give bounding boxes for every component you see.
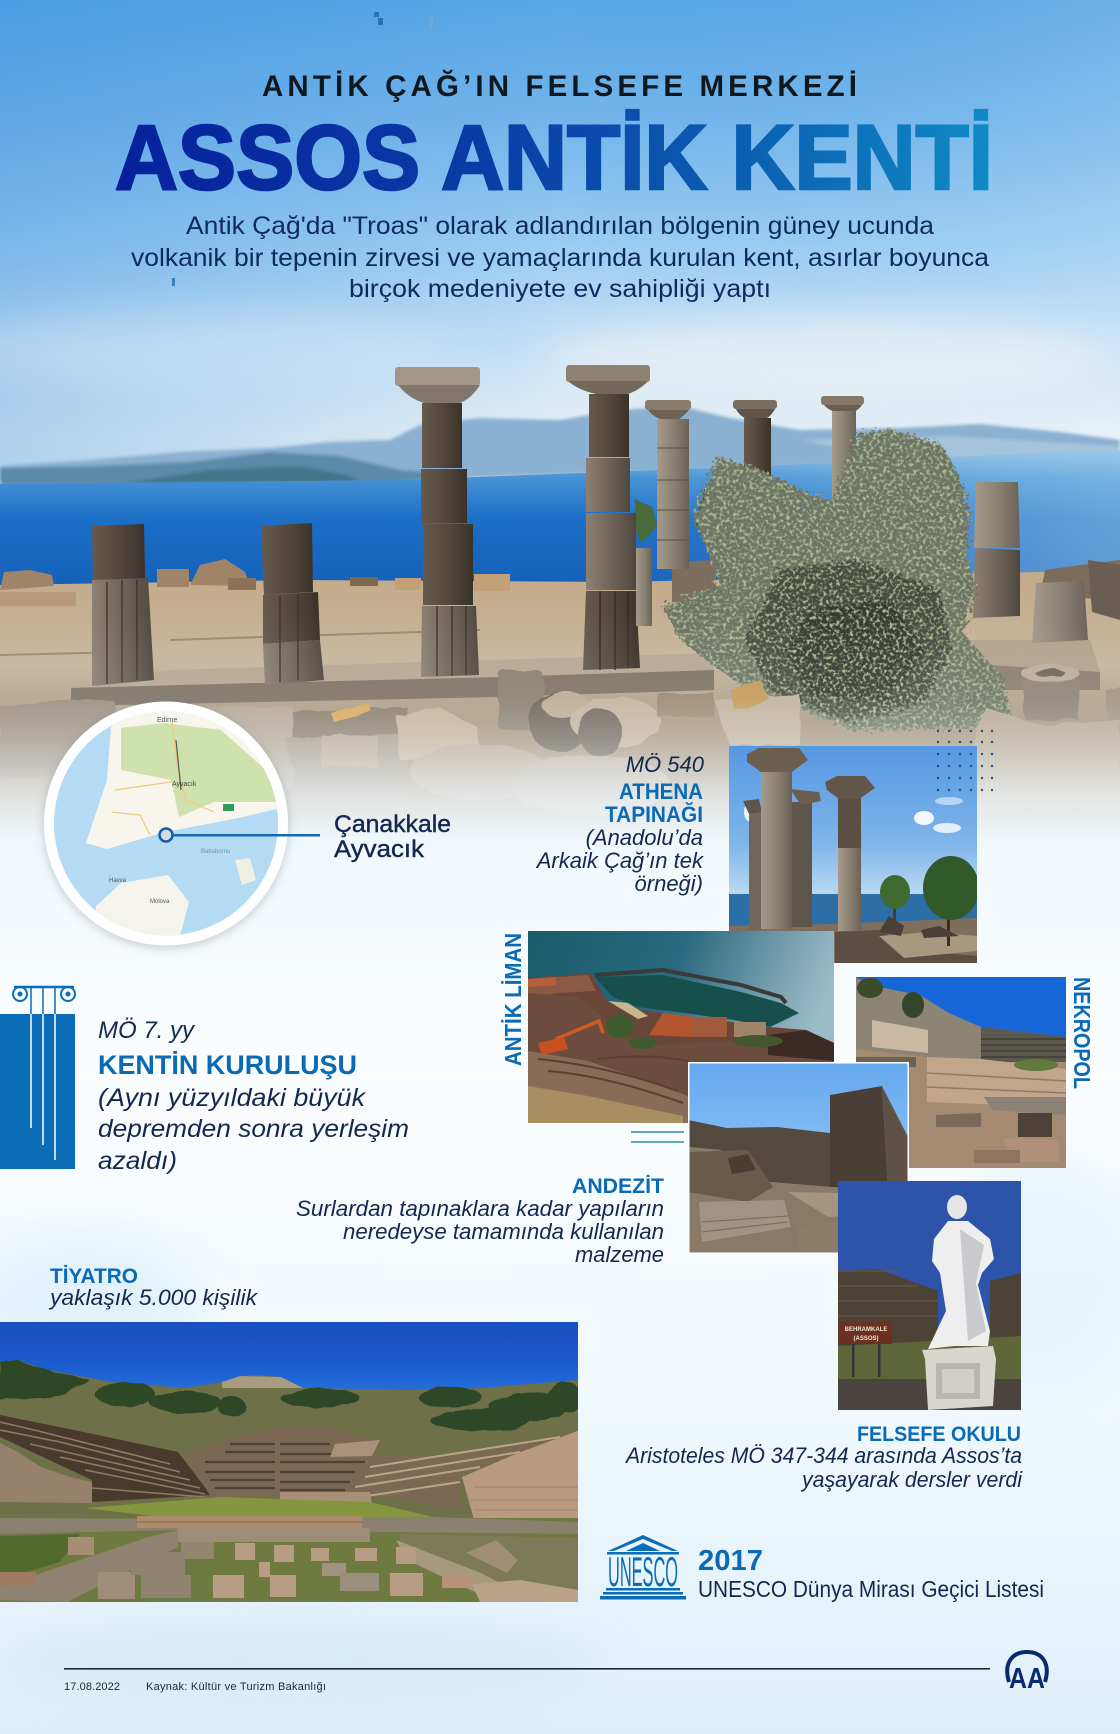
photo: Aristotle statue: (ASSOS) [853,1336,879,1342]
olive bush [663,430,1013,730]
intro paragraph: birçok medeniyete ev sahipliği yaptı [349,275,771,303]
text: city founding: KENTİN KURULUŞU [98,1050,357,1080]
location map: Molova [150,899,170,905]
text: Athena temple: ATHENA [619,779,703,804]
footer source text [64,1681,326,1693]
text: andesite: Surlardan tapınaklara kadar yapıların [296,1196,664,1221]
location label [334,811,451,863]
footer source text: Kaynak: Kültür ve Turizm Bakanlığı [146,1681,326,1693]
text: theatre: yaklaşık 5.000 kişilik [48,1285,258,1310]
left stub column 2 [261,523,324,685]
location map: Havva [109,878,127,884]
location map: Ayvacık [172,781,197,788]
location label: Çanakkale [334,811,451,838]
label: Antik Liman: ANTİK LİMAN [500,933,526,1066]
text: city founding [98,1017,409,1175]
photo: ancient harbour [528,931,834,1123]
text: theatre [48,1265,258,1310]
location label: Ayvacık [334,836,425,863]
text: UNESCO [608,1548,678,1595]
text: Athena temple: MÖ 540 [626,752,705,777]
photo: Aristotle statue: BEHRAMKALE [845,1327,887,1333]
icon: Anadolu Agency logo [1007,1652,1047,1695]
icon: UNESCO temple logo [600,1535,686,1600]
ground [0,570,1120,850]
text: philosophy school [624,1423,1023,1492]
text: city founding: azaldı) [98,1147,177,1175]
decorative dot grid [937,730,993,791]
location map: Bababurnu [201,849,230,855]
text: andesite: ANDEZİT [572,1175,664,1198]
intro paragraph [131,212,989,303]
far columns [645,396,864,569]
icon: column [0,987,75,1169]
photo: Aristotle statue [838,1181,1021,1410]
statue figure [928,1195,994,1349]
location map: Edirne [157,717,177,724]
text: Athena temple: TAPINAĞI [605,802,703,827]
location map [44,700,320,950]
photo: theatre [0,1322,578,1602]
photo: Athena temple [729,746,977,963]
right stub columns [973,482,1120,643]
main title: ASSOS ANTİK KENTİ [115,107,993,209]
small trees behind the bush [633,477,742,550]
text: Athena temple: örneği) [635,871,703,896]
mountains [0,406,1120,486]
text: UNESCO status [698,1545,1044,1602]
text: andesite: neredeyse tamamında kullanılan [343,1219,664,1244]
photo fade to page colour [0,610,1120,850]
text: Athena temple [535,752,705,896]
footer rule [64,1668,990,1670]
photo: necropolis [856,977,1066,1168]
text: city founding: (Aynı yüzyıldaki büyük [98,1084,367,1112]
footer source text: 17.08.2022 [64,1681,120,1693]
sea [0,450,1120,590]
text: city founding: MÖ 7. yy [98,1017,196,1044]
text: andesite [296,1175,664,1267]
tall column 1 [395,367,480,677]
label: Nekropol: NEKROPOL [1069,977,1095,1089]
hero photo: ruins of the Athena temple above the sea [0,365,1120,850]
distant stones [0,559,1120,606]
stepped platform [0,630,1100,706]
text: city founding: depremden sonra yerleşim [98,1115,409,1143]
left stub column 1 [92,524,154,686]
photo: andesite tower and walls [688,1062,909,1254]
text: andesite: malzeme [575,1242,664,1267]
subtitle heading: ANTİK ÇAĞ’IN FELSEFE MERKEZİ [262,69,857,103]
text: UNESCO status: UNESCO Dünya Mirası Geçici Listesi [698,1576,1044,1602]
decorative teal lines [631,1132,684,1142]
intro paragraph: Antik Çağ'da "Troas" olarak adlandırılan bölgenin güney ucunda [186,212,934,240]
text: theatre: TİYATRO [50,1265,138,1288]
rubble in foreground [0,664,1120,815]
text: philosophy school: FELSEFE OKULU [857,1423,1021,1446]
text: Athena temple: Arkaik Çağ’ın tek [535,848,704,873]
intro paragraph: volkanik bir tepenin zirvesi ve yamaçlarında kurulan kent, asırlar boyunca [131,244,989,272]
text: philosophy school: Aristoteles MÖ 347-344 arasında Assos’ta [624,1443,1022,1468]
tall column 2 [566,365,652,670]
text: UNESCO status: 2017 [698,1545,763,1577]
text: philosophy school: yaşayarak dersler verdi [800,1467,1023,1492]
icon: Anadolu Agency logo: AA [1009,1663,1045,1695]
statue pedestal [922,1346,996,1410]
text: Athena temple: (Anadolu’da [586,825,703,850]
